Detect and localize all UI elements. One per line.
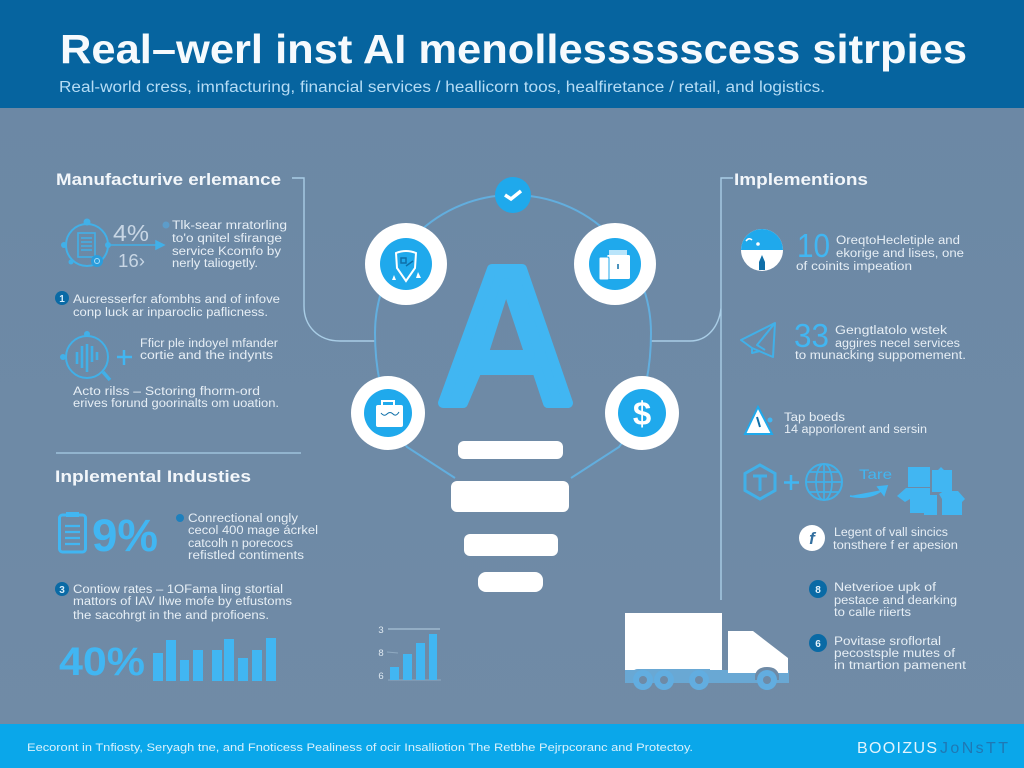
connector: left bracket	[292, 178, 375, 341]
text block 5	[188, 513, 318, 562]
text block 9: 14 apporlorent and sersin	[784, 424, 927, 436]
text block 11: to calle riierts	[834, 607, 911, 619]
icon: magnifier chart	[60, 331, 110, 380]
label: Tare: Tare	[859, 466, 892, 482]
text block 1	[172, 220, 287, 270]
text block 4: erives forund goorinalts om uoation.	[73, 398, 279, 410]
text block 6: Contiow rates – 1OFama ling stortial	[73, 584, 283, 596]
icon: document gear	[61, 218, 111, 267]
icon: plus	[784, 475, 799, 490]
text block 6	[73, 584, 292, 622]
text block 5: catcolh n porecocs	[188, 538, 293, 550]
small bar chart: 3	[378, 625, 384, 636]
badge 4	[809, 580, 827, 598]
heading: implementations: Implementions	[734, 170, 868, 189]
small bar chart	[378, 625, 441, 682]
badge 3: 3	[59, 585, 65, 596]
text block 1: to'o qnitel sfirange	[172, 233, 282, 245]
subtitle: Real-world cress, imnfacturing, financial services / heallicorn toos, healfiretance / retail, and logistics.	[59, 79, 825, 96]
text block 6: the sacohrgt in the and profioens.	[73, 610, 269, 622]
bulb outline ring	[375, 195, 651, 478]
icon: dollar	[605, 376, 679, 450]
icon: paper plane	[741, 323, 775, 357]
icon: clipboard	[60, 512, 86, 552]
text block 10	[833, 527, 958, 552]
text block 5: cecol 400 mage ácrkel	[188, 525, 318, 537]
footer text: Eecoront in Tnfiosty, Seryagh tne, and Fnoticess Pealiness of ocir Insalliotion The Retbhe Pejrpcoranc and Protectoy.	[27, 742, 693, 754]
stat: 16: 16›	[118, 251, 145, 271]
text block 7	[796, 235, 964, 273]
badge 4: 8	[815, 585, 821, 596]
footer brand: JoNsTT	[940, 740, 1008, 757]
text block 4: Acto rilss – Sctoring fhorm-ord	[73, 386, 260, 398]
text block 3	[140, 338, 278, 362]
text block 2: Aucresserfcr afombhs and of infove	[73, 294, 280, 306]
text block 3: Fficr ple indoyel mfander	[140, 338, 278, 350]
title: Real–werl inst AI menollessssscess sitrpies	[60, 26, 967, 72]
heading: industries: Inplemental Industies	[55, 467, 251, 486]
footer band	[0, 724, 1024, 768]
central diagram	[351, 177, 679, 592]
panel: manufacturing	[55, 170, 287, 410]
icon: half circle pen	[741, 229, 783, 271]
icon: boxes and shirts	[897, 467, 965, 515]
small bar chart: 8	[378, 648, 384, 659]
stat: 40%: 40%	[59, 640, 145, 684]
arrow: curved	[850, 486, 887, 497]
text block 7: ekorige and lises, one	[836, 248, 964, 260]
text block 11	[834, 582, 957, 619]
truck	[625, 613, 789, 690]
text block 1: service Kcomfo by	[172, 246, 281, 258]
badge 1: 1	[59, 294, 65, 305]
badge 1	[55, 291, 69, 305]
text block 9: Tap boeds	[784, 412, 845, 424]
text block 11: pestace and dearking	[834, 595, 957, 607]
stat: 33: 33	[794, 317, 829, 354]
text block 12	[834, 636, 967, 672]
small bar chart: 6	[378, 671, 384, 682]
text block 8	[795, 325, 966, 362]
icon: f circle	[799, 525, 825, 551]
text block 4	[73, 386, 279, 410]
text block 2	[73, 294, 280, 319]
badge 5: 6	[815, 639, 821, 650]
footer brand: BOOIZUS	[857, 740, 937, 757]
panel: implementations	[734, 170, 967, 672]
text block 1: nerly taliogetly.	[172, 258, 258, 270]
heading: manufacturing: Manufacturive erlemance	[56, 170, 281, 189]
text block 12: pecostsple mutes of	[834, 648, 956, 660]
footer brand	[857, 740, 1008, 757]
text block 9	[784, 412, 927, 436]
icon: f circle: f	[809, 529, 817, 548]
text block 10: Legent of vall sincics	[834, 527, 948, 539]
badge 3	[55, 582, 69, 596]
text block 7: of coinits impeation	[796, 261, 912, 273]
text block 6: mattors of IAV Ilwe mofe by etfustoms	[73, 596, 292, 608]
arrow	[108, 241, 164, 249]
stat: 10: 10	[797, 227, 830, 264]
text block 1: Tlk-sear mratorling	[172, 220, 287, 232]
header band	[0, 0, 1024, 108]
text block 12: in tmartion pamenent	[834, 660, 967, 672]
text block 3: cortie and the indynts	[140, 350, 273, 362]
icon: dollar: $	[633, 395, 651, 432]
icon: shield	[365, 223, 447, 305]
text block 12: Povitase sroflortal	[834, 636, 941, 648]
icon: warning triangle	[745, 407, 772, 434]
icon: documents	[574, 223, 656, 305]
icon: hexagon	[745, 465, 775, 499]
icon: plus	[117, 350, 132, 365]
icon: briefcase	[351, 376, 425, 450]
text block 5: Conrectional ongly	[188, 513, 298, 525]
bulb base bars	[451, 441, 569, 592]
icon: top check	[495, 177, 531, 213]
text block 8: aggires necel services	[835, 338, 960, 350]
connector: right bracket	[651, 178, 733, 600]
text block 2: conp luck ar inparoclic paflicness.	[73, 307, 268, 319]
badge 5	[809, 634, 827, 652]
icon: globe	[806, 464, 842, 500]
text block 7: OreqtoHecletiple and	[836, 235, 960, 247]
stat: 4%: 4%	[113, 220, 149, 246]
text block 10: tonsthere f er apesion	[833, 540, 958, 552]
text block 5: refistled contiments	[188, 550, 304, 562]
text block 8: to munacking suppomement.	[795, 350, 966, 362]
text block 11: Netverioe upk of	[834, 582, 937, 594]
letter A	[443, 269, 568, 403]
bar chart: left	[153, 638, 276, 681]
text block 8: Gengtlatolo wstek	[835, 325, 947, 337]
stat: 9%: 9%	[92, 510, 158, 561]
panel: industries	[55, 467, 318, 684]
